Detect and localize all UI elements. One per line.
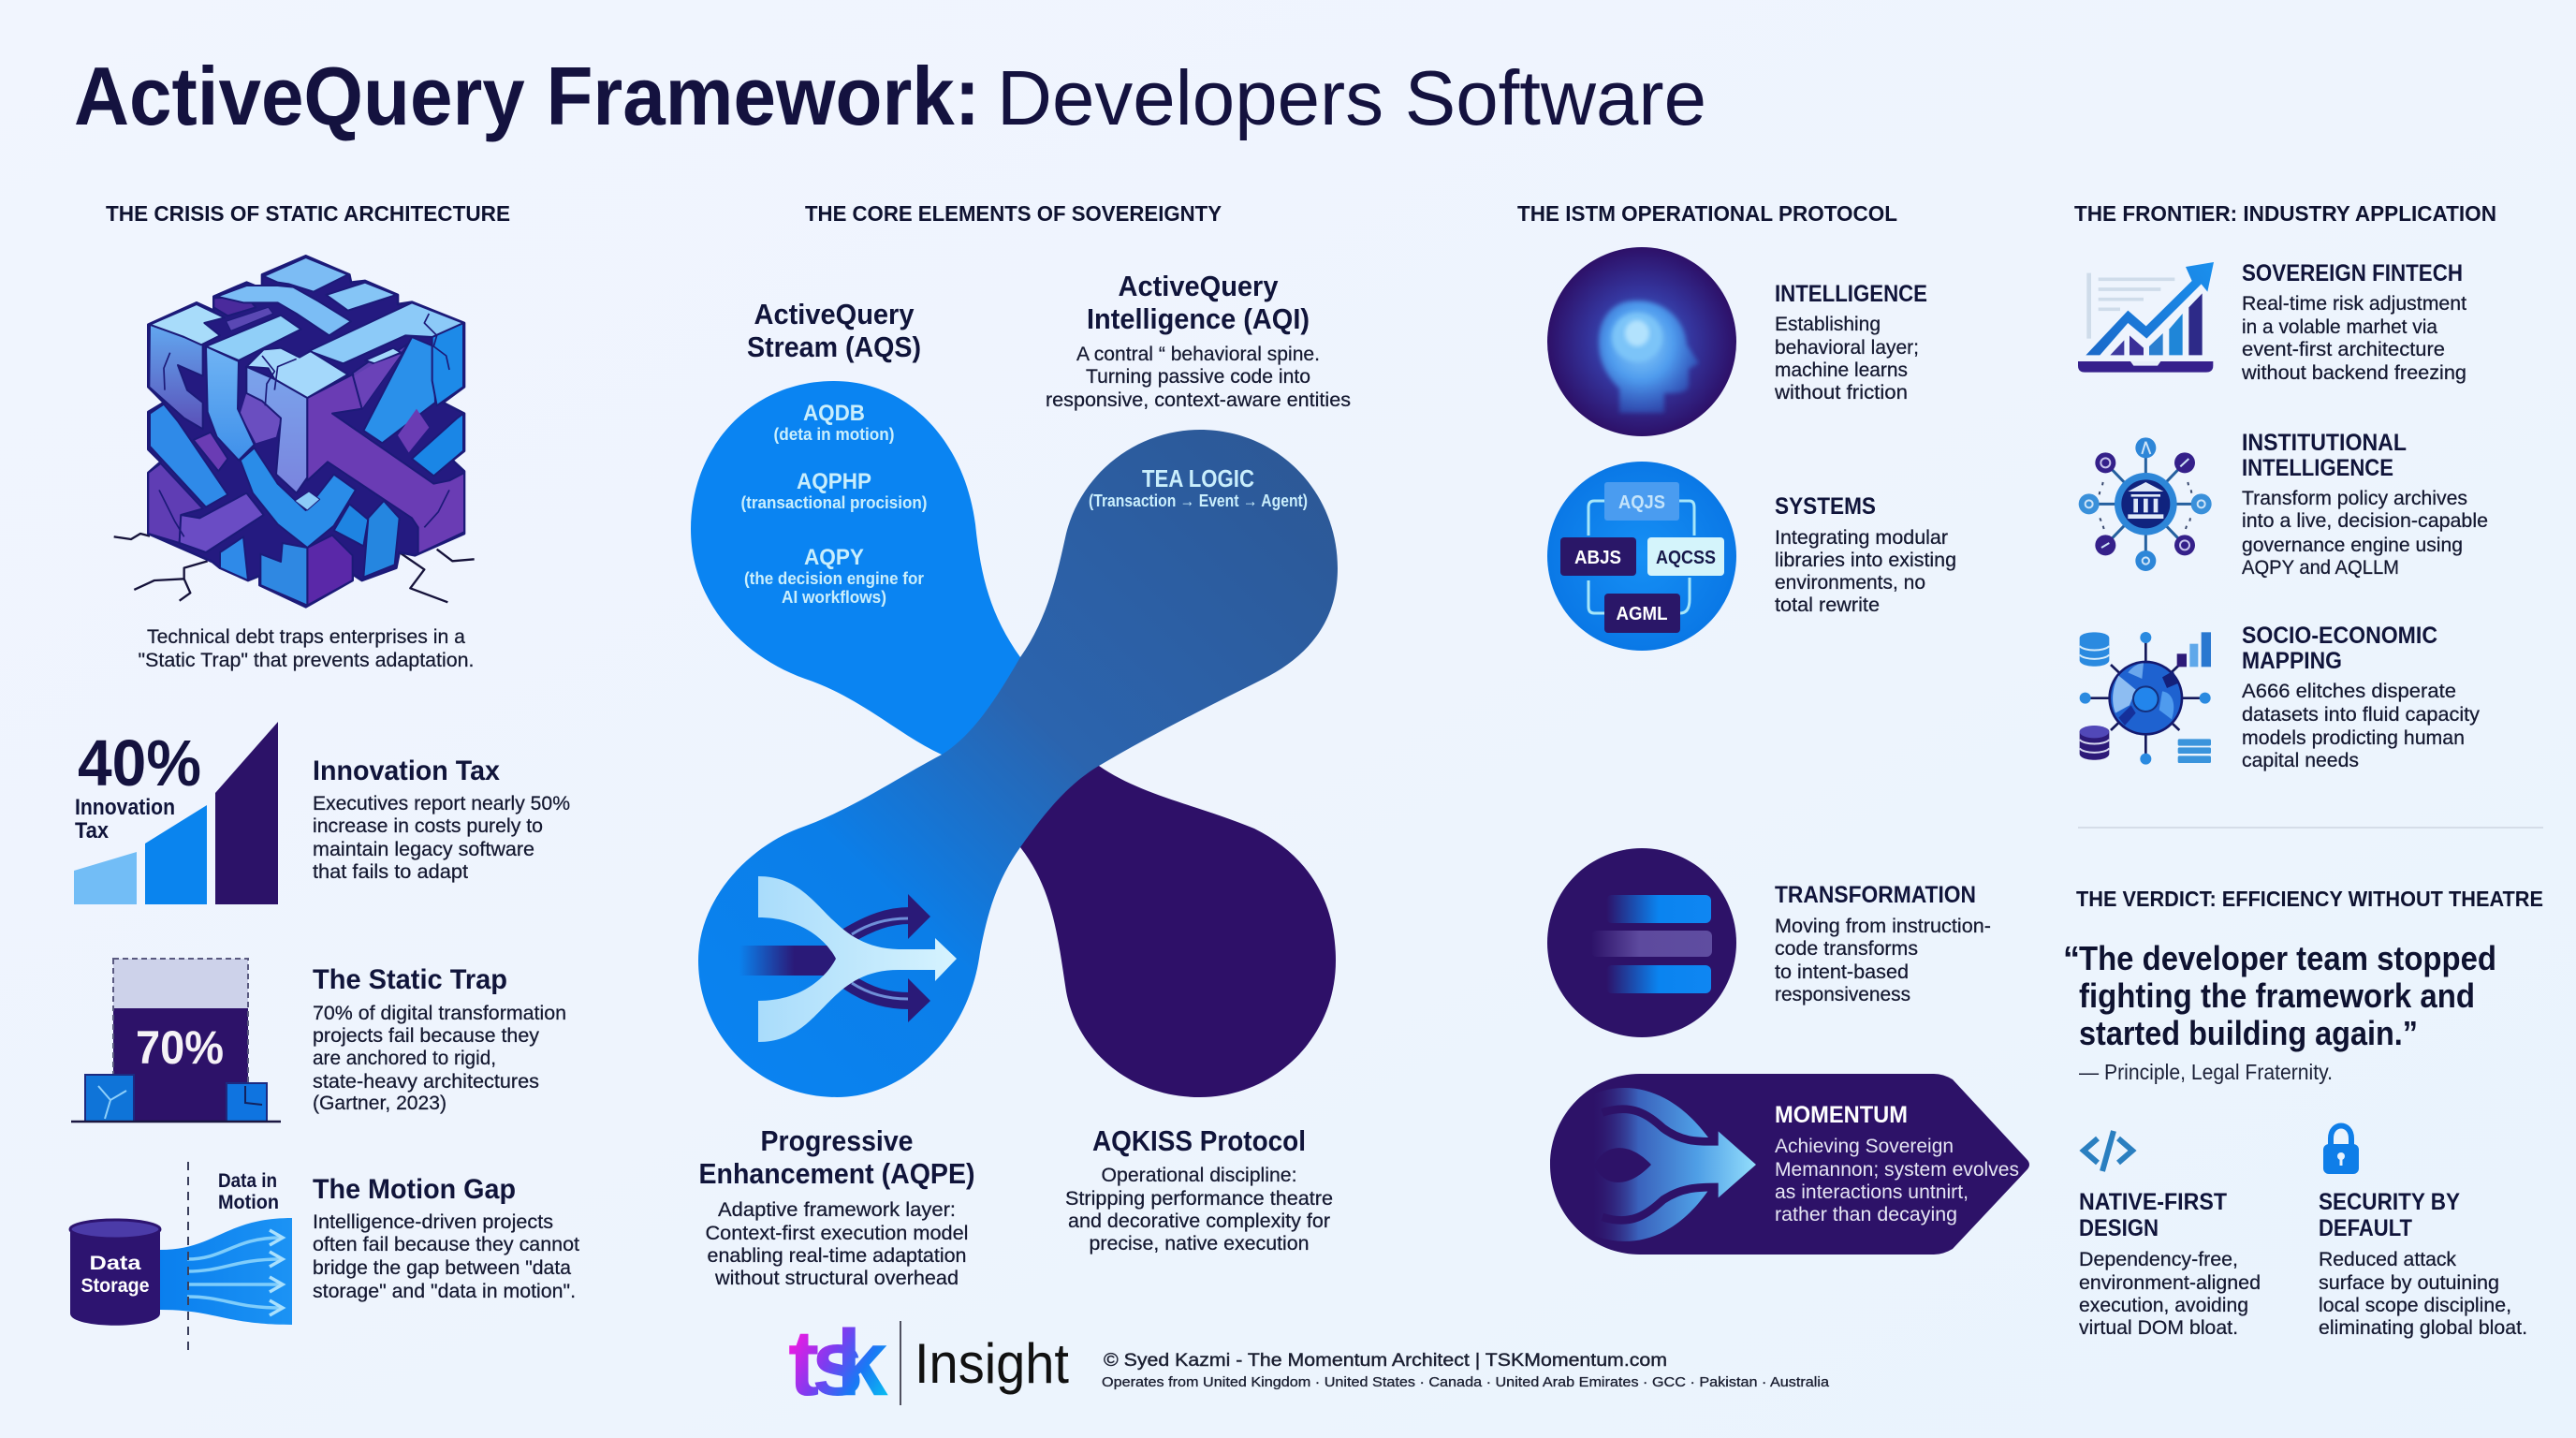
icon: institutional network <box>2079 437 2212 571</box>
lobe text: tea logic: TEA LOGIC <box>1142 464 1254 492</box>
text: security by default: eliminating global bloat. <box>2319 1316 2527 1339</box>
text: socio-economic mapping: A666 elitches disperate <box>2242 680 2456 702</box>
quote: fighting the framework and <box>2079 976 2475 1015</box>
quote: — Principle, Legal Fraternity. <box>2079 1060 2333 1084</box>
text: socio-economic mapping: datasets into fluid capacity <box>2242 703 2480 726</box>
text: institutional intelligence: INSTITUTIONAL <box>2242 430 2407 456</box>
logo: tsk insight: Insight <box>915 1332 1069 1395</box>
text: transformation: code transforms <box>1775 937 1918 960</box>
label: progressive enhancement: Adaptive framework layer: <box>718 1198 956 1221</box>
logo: tsk insight <box>788 1311 1069 1416</box>
text: systems: environments, no <box>1775 571 1925 594</box>
callout: momentum: as interactions untnirt, <box>1775 1181 1969 1203</box>
chart: 40% innovation tax bars: 40% <box>78 726 201 800</box>
text: intelligence <box>1774 281 1927 404</box>
text: socio-economic mapping: models prodicting human <box>2242 726 2465 749</box>
text: systems: libraries into existing <box>1775 549 1956 571</box>
lobe text: tea logic: (Transaction → Event → Agent) <box>1089 492 1308 510</box>
credits: © Syed Kazmi - The Momentum Architect | TSKMomentum.com <box>1104 1351 1667 1371</box>
icon: systems modules: AQCSS <box>1656 548 1716 568</box>
text: intelligence: Establishing <box>1775 313 1881 335</box>
text: transformation: Moving from instruction- <box>1775 915 1991 937</box>
label: aqkiss protocol: Operational discipline: <box>1101 1164 1297 1186</box>
text: sovereign fintech: event-first architecture <box>2242 338 2445 360</box>
lobe text: AQS components: AI workflows) <box>782 588 886 607</box>
label: activequery intelligence: ActiveQuery <box>1118 270 1279 302</box>
label: activequery intelligence: A contral “ behavioral spine. <box>1076 343 1320 365</box>
quote: started building again.” <box>2079 1014 2418 1052</box>
panel: the frontier industry application <box>2074 201 2496 771</box>
text: innovation tax: Innovation Tax <box>313 756 500 786</box>
text: intelligence: INTELLIGENCE <box>1775 281 1927 307</box>
chart: 70% static trap: 70% <box>136 1021 224 1074</box>
diagram: data storage to data in motion: Storage <box>80 1275 150 1297</box>
footer: logo and credits <box>788 1311 1830 1416</box>
logo: tsk insight: tsk <box>788 1311 888 1416</box>
label: aqkiss protocol: precise, native execution <box>1090 1232 1309 1255</box>
panel: the crisis of static architecture <box>70 201 579 1352</box>
diagram: four-lobed X <box>691 381 1338 1097</box>
icon: systems modules: AGML <box>1616 604 1668 624</box>
text: motion gap <box>313 1174 579 1302</box>
quote: The developer team stopped <box>2079 939 2496 977</box>
text: security by default: DEFAULT <box>2319 1215 2412 1241</box>
text: native-first design <box>2079 1189 2261 1339</box>
text: native-first design: DESIGN <box>2079 1215 2159 1241</box>
text: institutional intelligence <box>2242 430 2488 579</box>
icon: momentum arrow <box>1594 1088 1756 1241</box>
heading: frontier: THE FRONTIER: INDUSTRY APPLICATION <box>2074 201 2496 226</box>
label: activequery stream: ActiveQuery <box>754 298 915 330</box>
callout: momentum: Achieving Sovereign <box>1775 1135 1954 1157</box>
text: innovation tax: that fails to adapt <box>313 860 468 883</box>
text: static trap: The Static Trap <box>313 964 507 995</box>
lobe text: AQS components: (deta in motion) <box>773 425 895 444</box>
icon: cracked tangled cube <box>114 256 475 607</box>
text: systems <box>1775 493 1956 616</box>
text: security by default: Reduced attack <box>2319 1248 2456 1270</box>
chart: 40% innovation tax bars: Innovation <box>75 795 175 820</box>
lobe text: AQS components: AQDB <box>803 401 865 426</box>
text: native-first design: NATIVE-FIRST <box>2079 1189 2227 1215</box>
text: static trap: are anchored to rigid, <box>313 1047 496 1069</box>
label: progressive enhancement: enabling real-time adaptation <box>708 1244 966 1267</box>
label: progressive enhancement: Context-first execution model <box>706 1222 968 1244</box>
text: socio-economic mapping <box>2242 623 2480 771</box>
text: sovereign fintech: SOVEREIGN FINTECH <box>2242 260 2463 286</box>
label: aqkiss protocol: and decorative complexity for <box>1068 1210 1330 1232</box>
label: activequery intelligence: Intelligence (AQI) <box>1087 302 1310 335</box>
label: progressive enhancement: Progressive <box>760 1124 914 1157</box>
label: progressive enhancement: without structural overhead <box>714 1267 959 1289</box>
text: intelligence: behavioral layer; <box>1775 336 1919 359</box>
icon: transformation bars <box>1547 848 1736 1037</box>
label: aqkiss protocol: AQKISS Protocol <box>1092 1124 1306 1157</box>
quote <box>2063 939 2496 1084</box>
chart: 40% innovation tax bars: Tax <box>75 818 110 844</box>
chart: 70% static trap <box>71 959 281 1122</box>
lobe text: AQS components: (the decision engine for <box>744 569 924 588</box>
diagram: data storage to data in motion <box>70 1162 292 1352</box>
label: aqkiss protocol: Stripping performance theatre <box>1065 1187 1333 1210</box>
label: progressive enhancement <box>698 1124 975 1289</box>
text: institutional intelligence: INTELLIGENCE <box>2242 455 2393 481</box>
heading: crisis: THE CRISIS OF STATIC ARCHITECTURE <box>106 201 510 226</box>
panel: the verdict <box>2063 887 2543 1339</box>
icon: merging arrows <box>739 876 957 1042</box>
diagram: data storage to data in motion: Data <box>90 1253 141 1274</box>
label: activequery intelligence <box>1046 270 1351 411</box>
text: security by default: local scope discipline, <box>2319 1294 2511 1316</box>
text: institutional intelligence: AQPY and AQLLM <box>2242 556 2399 579</box>
label: aqkiss protocol <box>1065 1124 1333 1255</box>
label: activequery stream: Stream (AQS) <box>747 330 921 363</box>
lobe text: AQS components: AQPY <box>804 545 864 570</box>
text: intelligence: machine learns <box>1775 359 1908 381</box>
heading: ISTM: THE ISTM OPERATIONAL PROTOCOL <box>1517 201 1897 226</box>
icon: code brackets <box>2084 1131 2132 1171</box>
lobe text: AQS components: AQPHP <box>797 469 871 494</box>
callout: momentum: Memannon; system evolves <box>1775 1158 2019 1181</box>
text: institutional intelligence: Transform policy archives <box>2242 487 2467 509</box>
text: systems: total rewrite <box>1775 594 1880 616</box>
text: systems: Integrating modular <box>1775 526 1948 549</box>
caption: technical debt <box>139 625 474 671</box>
text: sovereign fintech: Real-time risk adjustment <box>2242 292 2466 315</box>
heading: verdict: THE VERDICT: EFFICIENCY WITHOUT THEATRE <box>2076 887 2543 911</box>
icon: padlock <box>2323 1125 2359 1174</box>
text: transformation <box>1775 882 1991 1005</box>
icon: intelligence head <box>1547 247 1736 436</box>
text: innovation tax: maintain legacy software <box>313 838 534 860</box>
title: ActiveQuery Framework: <box>74 50 980 142</box>
text: intelligence: without friction <box>1774 381 1908 404</box>
label: activequery intelligence: responsive, context-aware entities <box>1046 389 1351 411</box>
caption: technical debt: "Static Trap" that prevents adaptation. <box>139 649 474 671</box>
text: institutional intelligence: into a live, decision-capable <box>2242 509 2488 532</box>
title <box>74 50 1706 142</box>
text: sovereign fintech <box>2241 260 2466 384</box>
text: motion gap: Intelligence-driven projects <box>313 1211 553 1233</box>
text: innovation tax: increase in costs purely to <box>313 814 543 837</box>
text: socio-economic mapping: MAPPING <box>2242 648 2342 674</box>
panel: the ISTM operational protocol <box>1517 201 2029 1255</box>
text: transformation: responsiveness <box>1775 983 1910 1005</box>
label: activequery intelligence: Turning passive code into <box>1086 365 1310 388</box>
text: native-first design: virtual DOM bloat. <box>2079 1316 2238 1339</box>
text: transformation: to intent-based <box>1775 961 1909 983</box>
title: Developers Software <box>997 54 1706 141</box>
callout: momentum: MOMENTUM <box>1775 1102 1908 1128</box>
icon: fintech chart on laptop <box>2078 262 2214 373</box>
text: socio-economic mapping: SOCIO-ECONOMIC <box>2242 623 2437 649</box>
text: systems: SYSTEMS <box>1775 493 1876 520</box>
text: socio-economic mapping: capital needs <box>2242 749 2359 771</box>
lobe text: tea logic <box>1089 464 1308 510</box>
text: static trap: state-heavy architectures <box>313 1070 539 1093</box>
text: innovation tax: Executives report nearly 50% <box>313 792 570 814</box>
diagram: data storage to data in motion: Data in <box>218 1170 277 1192</box>
text: sovereign fintech: in a volable marhet via <box>2242 315 2437 338</box>
icon: systems modules: AQJS <box>1618 492 1665 513</box>
text: static trap: 70% of digital transformation <box>313 1002 566 1024</box>
icon: systems modules: ABJS <box>1574 548 1621 568</box>
text: native-first design: environment-aligned <box>2079 1271 2261 1294</box>
caption: technical debt: Technical debt traps enterprises in a <box>147 625 465 648</box>
text: motion gap: storage" and "data in motion". <box>313 1280 576 1302</box>
text: native-first design: Dependency-free, <box>2079 1248 2238 1270</box>
diagram: data storage to data in motion: Motion <box>218 1192 279 1213</box>
text: motion gap: bridge the gap between "data <box>313 1256 571 1279</box>
text: motion gap: The Motion Gap <box>313 1174 516 1205</box>
panel: the core elements of sovereignty <box>691 201 1351 1289</box>
icon: systems modules <box>1547 462 1736 651</box>
lobe text: AQS components: (transactional procision) <box>741 493 927 512</box>
text: static trap <box>313 964 566 1114</box>
text: motion gap: often fail because they cannot <box>313 1233 579 1255</box>
text: static trap: (Gartner, 2023) <box>313 1092 446 1114</box>
label: activequery stream <box>747 298 921 363</box>
lobe text: AQS components <box>741 401 927 607</box>
text: security by default: surface by outuining <box>2319 1271 2499 1294</box>
text: security by default: SECURITY BY <box>2319 1189 2460 1215</box>
quote: “ <box>2063 939 2080 977</box>
icon: socio-economic globe network <box>2080 632 2211 765</box>
chart: 40% innovation tax bars <box>74 722 278 904</box>
text: transformation: TRANSFORMATION <box>1775 882 1976 908</box>
callout: momentum: rather than decaying <box>1775 1203 1957 1225</box>
label: progressive enhancement: Enhancement (AQPE) <box>698 1157 975 1190</box>
credits <box>1102 1351 1830 1390</box>
text: innovation tax <box>313 756 570 883</box>
text: native-first design: execution, avoiding <box>2079 1294 2248 1316</box>
text: security by default <box>2319 1189 2527 1339</box>
text: institutional intelligence: governance engine using <box>2242 534 2463 556</box>
credits: Operates from United Kingdom · United States · Canada · United Arab Emirates · GCC · Pakistan · Australia <box>1102 1374 1830 1390</box>
text: sovereign fintech: without backend freezing <box>2241 361 2466 384</box>
heading: core elements: THE CORE ELEMENTS OF SOVEREIGNTY <box>805 201 1222 226</box>
callout: momentum <box>1550 1074 2029 1255</box>
text: static trap: projects fail because they <box>313 1024 539 1047</box>
